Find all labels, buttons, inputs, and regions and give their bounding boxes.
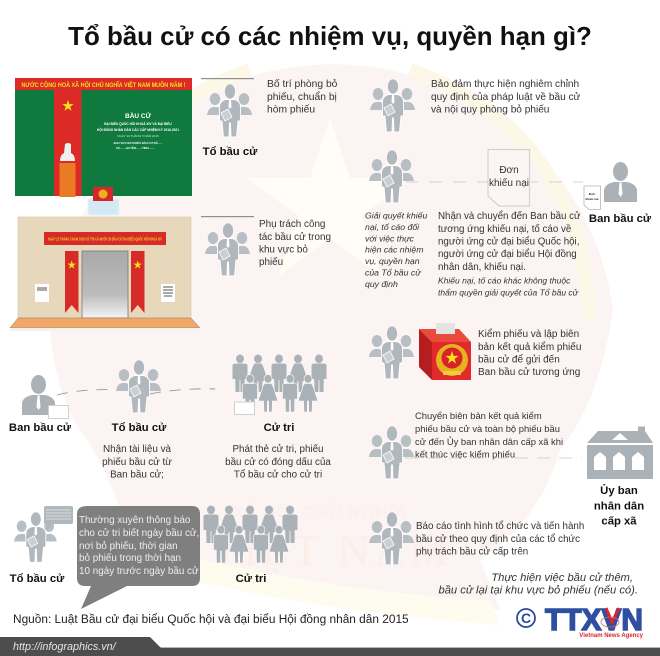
logo: TTXVN: Vietnam News Agency — [579, 633, 644, 639]
text: receive materials: Nhận tài liệu và — [103, 444, 172, 455]
icon: election team handling complaints — [369, 150, 414, 203]
icon: complaint document — [488, 150, 530, 206]
callout: notify voters — [77, 506, 200, 609]
icon: election committee with document — [584, 162, 637, 210]
arrow: team to voters — [150, 389, 215, 394]
text: resolve complaints: nại, tố cáo đối — [365, 222, 420, 232]
background national emblem watermark: VIỆT NAM — [207, 526, 453, 575]
icon: complaint document: Đơn — [499, 165, 519, 176]
text: resolve complaints: hiện các nhiệm — [365, 244, 423, 254]
text: report: bầu cử theo quy định của các tổ chức — [416, 534, 580, 545]
arrow: committee to team — [57, 390, 122, 395]
text: receive and forward complaints: người ứng cử đại biểu Quốc hội, — [438, 236, 579, 248]
text: report: phụ trách bầu cử cấp trên — [416, 546, 528, 558]
icon: election committee — [22, 375, 55, 415]
label: Ban bầu cử: Ban bầu cử — [9, 422, 72, 434]
label: Tổ bầu cử: Tổ bầu cử — [203, 146, 258, 158]
label: Ủy ban nhân dân cấp xã: cấp xã — [601, 516, 637, 528]
text: transfer results: kết thúc việc kiểm phiếu — [415, 448, 515, 460]
label: Tổ bầu cử: Tổ bầu cử — [112, 422, 167, 434]
icon: voters — [204, 506, 298, 563]
illustration: polling room: NGÀY 22 THÁNG 5 NĂM 2016 — [117, 134, 159, 138]
text: issue voter cards: bầu cử có đóng dấu của — [225, 457, 331, 468]
text: receive and forward complaints: người ứng cử đại biểu Hội đồng — [438, 249, 577, 260]
icon: election team enforcing rules — [370, 79, 415, 132]
illustration: polling room: KHU VỰC BỎ PHIẾU BẦU CỬ SỐ...... — [114, 140, 163, 145]
icon: election committee with document: khiếu nại — [585, 197, 599, 201]
icon: complaint document: khiếu nại — [489, 177, 529, 189]
text: enforce regulations: quy định của pháp luật về bầu cử — [431, 91, 581, 103]
icon: election team with speech bubble — [14, 506, 73, 562]
text: receive and forward complaints: Nhận và chuyển đến Ban bầu cử — [438, 211, 581, 222]
background national emblem watermark: XÃ HỘI CHỦ NGHĨA — [233, 503, 407, 522]
text: count votes: bản kết quả kiểm phiếu — [478, 341, 581, 353]
text: receive materials: Ban bầu cử; — [110, 470, 164, 480]
text: other complaints note: thẩm quyền giải quyết của Tổ bầu cử — [438, 288, 579, 298]
text: other complaints note: Khiếu nại, tố cáo khác không thuộc — [438, 276, 571, 286]
callout: notify voters: 10 ngày trước ngày bầu cử — [79, 566, 199, 577]
task: in charge of election area — [201, 216, 254, 276]
text: enforce regulations: Bảo đảm thực hiện nghiêm chỉnh — [431, 78, 579, 90]
illustration: polling room: NƯỚC CỘNG HOÀ XÃ HỘI CHỦ NGHĨA VIỆT NAM MUÔN NĂM ! — [22, 80, 186, 89]
text: count votes: Ban bầu cử tương ứng — [478, 366, 580, 378]
text: arrange room: hòm phiếu — [267, 104, 315, 116]
label: Tổ bầu cử: Tổ bầu cử — [10, 573, 65, 585]
label: Ủy ban nhân dân cấp xã: Ủy ban — [600, 484, 638, 497]
icon: voter card — [234, 402, 254, 414]
source: Nguồn: Luật Bầu cử đại biểu Quốc hội và đại biểu Hội đồng nhân dân 2015 — [13, 612, 409, 626]
illustration: polling room: NGÀY 22 THÁNG 5 NĂM 2016 CỬ TRI CẢ NƯỚC ĐI BẦU CỬ ĐẠI BIỂU QUỐC HỘI KHOÁ XIV — [48, 234, 162, 242]
arrow: complaint dashed — [405, 181, 583, 183]
illustration: polling room: HỘI ĐỒNG NHÂN DÂN CÁC CẤP NHIỆM KỲ 2016-2021 — [97, 127, 179, 132]
icon: election team counting — [369, 326, 414, 379]
illustration: polling room — [10, 78, 200, 331]
label: Ủy ban nhân dân cấp xã: nhân dân — [594, 500, 644, 512]
callout: notify voters: nơi bỏ phiếu, thời gian — [79, 541, 178, 552]
icon: election committee with document: Đơn — [589, 192, 595, 196]
callout: notify voters: bỏ phiếu trong thời hạn — [79, 553, 181, 564]
icon: election team — [116, 360, 161, 413]
icon: commune committee house — [587, 426, 653, 479]
icon: voters — [232, 354, 326, 412]
text: issue voter cards: Phát thẻ cử tri, phiếu — [233, 444, 323, 455]
text: in charge: khu vực bỏ — [259, 244, 308, 256]
footer bar — [0, 637, 660, 656]
callout: notify voters: Thường xuyên thông báo — [79, 515, 191, 526]
label: Ban bầu cử: Ban bầu cử — [589, 213, 652, 225]
text: additional election note: bầu cử lại tại khu vực bỏ phiếu (nếu có). — [438, 584, 638, 596]
illustration: polling room: BẦU CỬ — [125, 110, 152, 120]
text: transfer results: phiếu bầu cử và toàn bộ phiếu bầu — [415, 423, 560, 434]
text: arrange room: phiếu, chuẩn bị — [267, 91, 337, 103]
text: receive and forward complaints: tương ứng khiếu nại, tố cáo về — [438, 224, 571, 235]
text: in charge: Phụ trách công — [259, 219, 325, 230]
text: resolve complaints: Giải quyết khiếu — [365, 210, 427, 220]
text: resolve complaints: với việc thực — [365, 234, 415, 244]
icon: election team — [205, 223, 250, 276]
text: additional election note: Thực hiện việc bầu cử thêm, — [491, 572, 633, 584]
callout: notify voters: cho cử tri biết ngày bầu cử, — [79, 528, 199, 539]
illustration: polling room: XÃ........HUYỆN........TỈNH....... — [116, 145, 154, 150]
footer url: http://infographics.vn/ — [13, 641, 117, 653]
text: report: Báo cáo tình hình tổ chức và tiến hành — [416, 521, 584, 532]
text: transfer results: cử đến Ủy ban nhân dân cấp xã khi — [415, 436, 563, 447]
text: receive and forward complaints: nhân dân, khiếu nại. — [438, 262, 526, 273]
text: resolve complaints: vụ, quyền hạn — [365, 256, 420, 266]
text: in charge: phiếu — [259, 257, 283, 268]
label: Cử tri: Cử tri — [264, 422, 294, 434]
text: enforce regulations: và nội quy phòng bỏ phiếu — [431, 104, 549, 116]
logo: TTXVN: C — [521, 610, 531, 626]
text: transfer results: Chuyển biên bản kết quả kiểm — [415, 410, 542, 421]
text: arrange room: Bố trí phòng bỏ — [267, 78, 338, 90]
text: count votes: bầu cử để gửi đến — [478, 354, 560, 366]
task: arrange the polling room — [201, 78, 254, 137]
icon: ballot box — [419, 323, 471, 380]
flow: committee to team to voters — [22, 354, 326, 418]
illustration: polling room: ĐẠI BIỂU QUỐC HỘI KHOÁ XIV VÀ ĐẠI BIỂU — [104, 121, 172, 126]
icon: election team reporting — [369, 512, 414, 565]
background national emblem watermark — [50, 64, 613, 625]
text: issue voter cards: Tổ bầu cử cho cử tri — [234, 470, 322, 480]
label: Cử tri: Cử tri — [236, 573, 266, 585]
text: receive materials: phiếu bầu cử từ — [102, 457, 172, 468]
icon: documents — [48, 406, 68, 418]
icon: election team — [207, 84, 252, 137]
text: in charge: tác bầu cử trong — [259, 232, 331, 243]
text: resolve complaints: của Tổ bầu cử — [365, 268, 422, 278]
title: Tổ bầu cử có các nhiệm vụ, quyền hạn gì? — [68, 23, 592, 51]
text: resolve complaints: quy định — [365, 279, 398, 289]
text: count votes: Kiểm phiếu và lập biên — [478, 328, 579, 340]
logo: TTXVN: TTXVN — [545, 602, 643, 637]
arrow: to commune committee — [405, 457, 582, 459]
icon: election team transferring results — [369, 426, 414, 479]
